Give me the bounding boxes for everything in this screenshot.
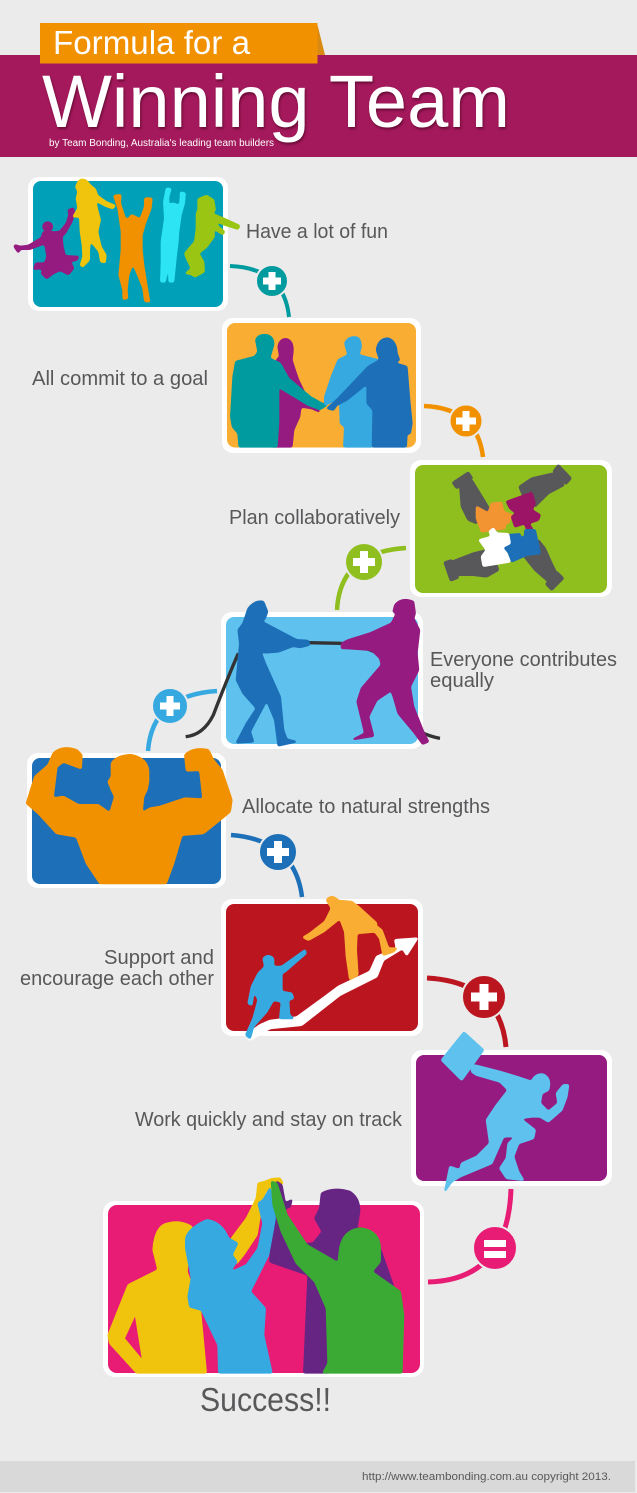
- label: work quickly: Work quickly and stay on track: [135, 1109, 403, 1131]
- running businessman: [442, 1032, 568, 1191]
- label: contributes equally: equally: [430, 670, 494, 692]
- connector: plus green: [337, 543, 406, 610]
- panel: commit to a goal: [222, 318, 421, 453]
- connector: plus red: [427, 975, 506, 1047]
- people joining hands: [231, 335, 412, 447]
- label: support each other: Support and: [104, 947, 214, 969]
- panel: work quickly: [411, 1032, 612, 1191]
- footer credit: http://www.teambonding.com.au copyright 2013.: [362, 1471, 611, 1483]
- label: commit to a goal: All commit to a goal: [32, 368, 208, 390]
- climbers on arrow: [246, 897, 417, 1040]
- team high five: [108, 1178, 403, 1373]
- byline: by Team Bonding, Australia's leading team builders: [49, 138, 274, 149]
- label: success: Success!!: [200, 1381, 331, 1418]
- header banner: [0, 23, 637, 157]
- hands with puzzle pieces: [444, 465, 571, 590]
- heading: Formula for a: Formula for a: [53, 24, 251, 61]
- label: have fun: Have a lot of fun: [246, 221, 388, 243]
- panel: plan collaboratively: [410, 460, 612, 597]
- connector: plus orange: [424, 404, 483, 457]
- label: plan collaboratively: Plan collaboratively: [229, 507, 400, 529]
- panel: support each other: [221, 897, 423, 1040]
- jumping people: [14, 179, 239, 302]
- connector: plus light blue: [148, 688, 217, 751]
- panel: contributes equally: [186, 600, 440, 749]
- panel: have fun: [14, 177, 239, 311]
- title: Winning Team: Winning Team: [42, 60, 510, 143]
- connector: plus blue: [231, 833, 302, 897]
- label: natural strengths: Allocate to natural strengths: [242, 796, 490, 818]
- connector: plus teal: [230, 265, 289, 317]
- label: support each other: encourage each other: [20, 968, 214, 990]
- tug of war: [186, 600, 440, 746]
- label: contributes equally: Everyone contributes: [430, 649, 617, 671]
- panel: success: [103, 1178, 424, 1377]
- connector: equals pink: [428, 1189, 517, 1282]
- flexing man: [27, 748, 232, 883]
- panel: natural strengths: [27, 748, 232, 888]
- footer bar: [0, 1461, 635, 1492]
